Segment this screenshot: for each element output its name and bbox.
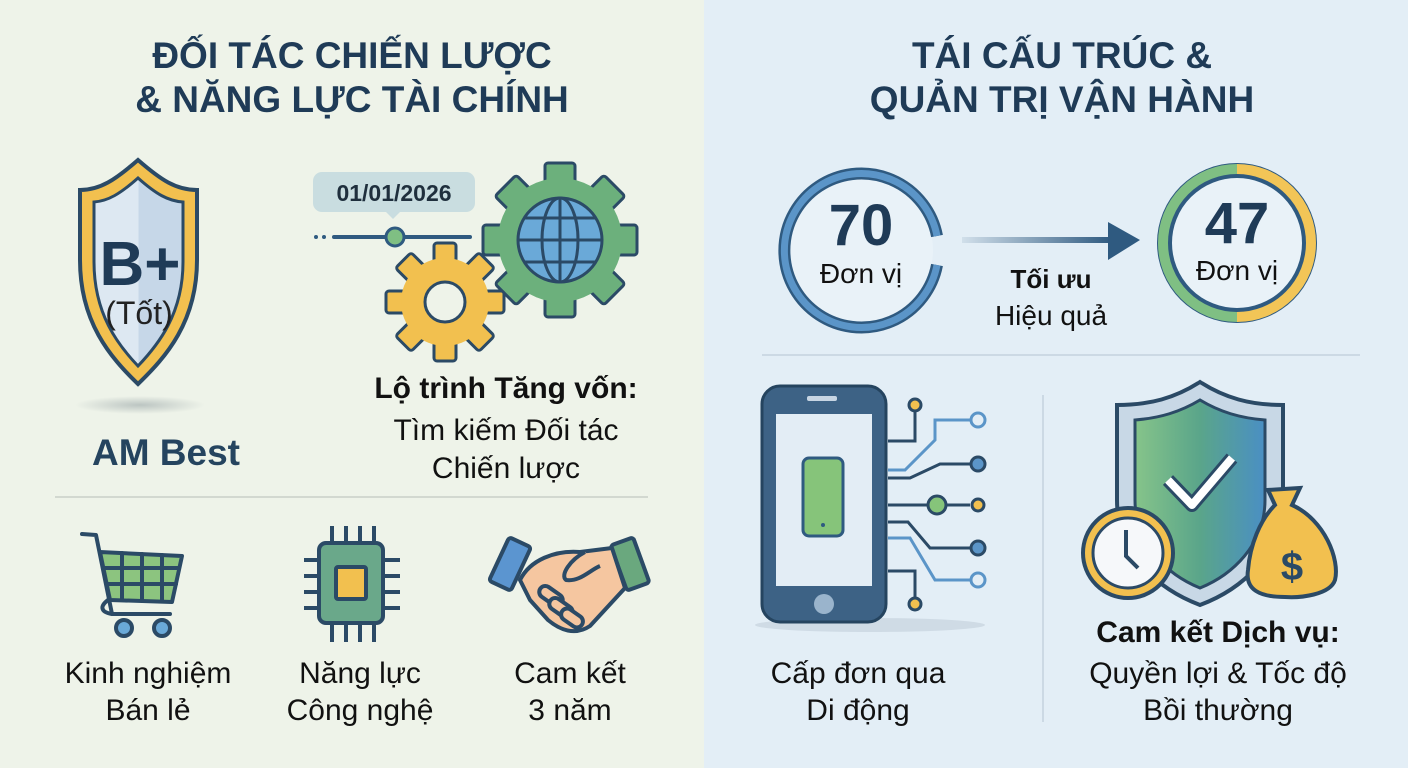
panel: right operations (755, 34, 1360, 727)
heading right: QUẢN TRỊ VẬN HÀNH (870, 78, 1254, 120)
chart: 70 units circle: Đơn vị (820, 258, 902, 289)
background left panel (0, 0, 704, 768)
chart: 47 units circle: 47 (1205, 191, 1269, 256)
text: capital roadmap (374, 372, 638, 485)
heading left: ĐỐI TÁC CHIẾN LƯỢC (152, 34, 552, 76)
label: mobile issuance (771, 657, 946, 727)
label: service commitment: Bồi thường (1143, 694, 1293, 727)
labels: bottom features: Bán lẻ (105, 694, 191, 727)
text: capital roadmap: Lộ trình Tăng vốn: (374, 372, 638, 405)
icon: handshake (489, 537, 649, 631)
labels: bottom features: Công nghệ (287, 694, 433, 727)
label: service commitment: Quyền lợi & Tốc độ (1089, 657, 1347, 690)
label: mobile issuance: Cấp đơn qua (771, 657, 946, 690)
arrow (962, 222, 1140, 260)
label: service commitment: Cam kết Dịch vụ: (1096, 616, 1340, 649)
label: mobile issuance: Di động (806, 694, 910, 727)
labels: bottom features: Năng lực (299, 657, 421, 690)
heading right (870, 34, 1254, 120)
heading left (135, 34, 569, 120)
chart: 47 units circle: Đơn vị (1196, 255, 1278, 286)
icon: mobile phone with circuits (755, 386, 985, 632)
text: capital roadmap: Tìm kiếm Đối tác (393, 414, 619, 447)
icon: AM Best shield: B+ (100, 230, 180, 299)
chart: 47 units circle (1157, 163, 1317, 323)
text: AM Best: AM Best (92, 432, 240, 473)
chart: 70 units circle (784, 174, 937, 328)
icon: shield with check, clock and money bag (1083, 382, 1336, 605)
text: optimize efficiency (995, 264, 1107, 331)
labels: bottom features: 3 năm (528, 694, 612, 727)
icon: AM Best shield: (Tốt) (105, 295, 173, 331)
text: optimize efficiency: Hiệu quả (995, 300, 1107, 331)
icon: shopping cart (82, 534, 182, 636)
labels: bottom features (65, 657, 627, 727)
icon: gears with globe (386, 163, 637, 361)
panel: left financial (55, 34, 649, 727)
callout: date 01/01/2026: 01/01/2026 (336, 180, 452, 206)
heading left: & NĂNG LỰC TÀI CHÍNH (135, 79, 569, 120)
heading right: TÁI CẤU TRÚC & (912, 34, 1212, 76)
label: service commitment (1089, 616, 1347, 727)
background right panel (704, 0, 1408, 768)
text: capital roadmap: Chiến lược (432, 452, 580, 485)
icon: chip (304, 526, 400, 642)
chart: 70 units circle: 70 (829, 193, 893, 258)
timeline (314, 228, 470, 246)
icon: shield with check, clock and money bag: $ (1281, 545, 1303, 589)
labels: bottom features: Cam kết (514, 657, 627, 690)
text: optimize efficiency: Tối ưu (1011, 264, 1091, 294)
callout: date 01/01/2026 (313, 172, 475, 219)
icon: AM Best shield (75, 160, 205, 414)
labels: bottom features: Kinh nghiệm (65, 657, 231, 690)
